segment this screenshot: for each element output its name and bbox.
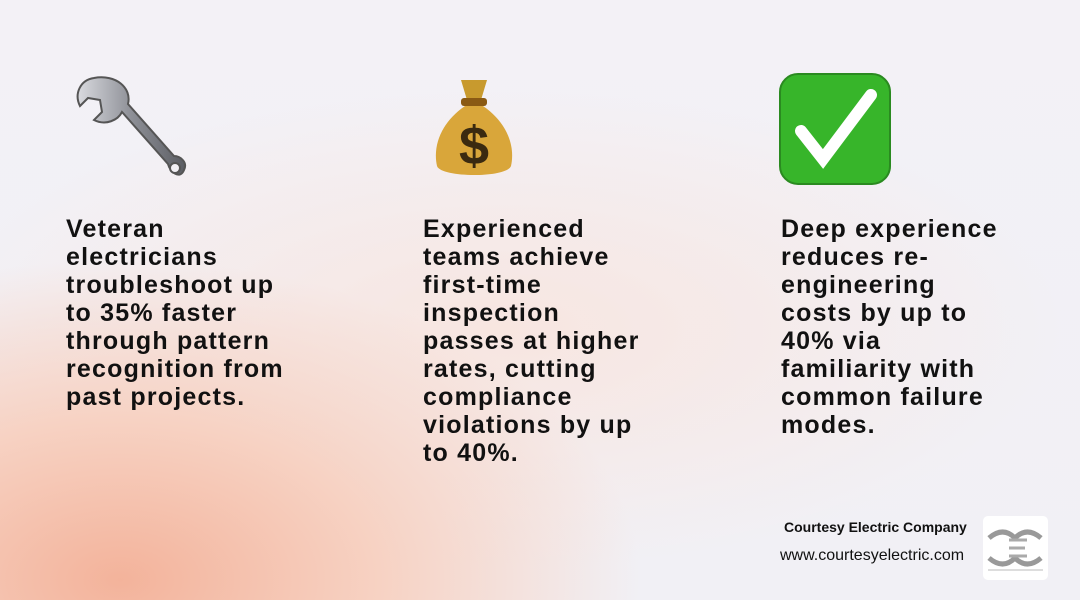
icon: wrench	[76, 76, 186, 176]
icon: money bag: $	[459, 116, 489, 176]
text: column 2: Experienced teams achieve first-time inspection passes at higher rates, cutting compliance violations by up to 40%.	[423, 215, 640, 467]
footer: company credit	[780, 519, 967, 564]
icon: money bag	[436, 80, 512, 176]
icon: check mark	[779, 73, 891, 185]
text: column 1: Veteran electricians troubleshoot up to 35% faster through pattern recognition from past projects.	[66, 215, 284, 411]
text: column 3: Deep experience reduces re-engineering costs by up to 40% via familiarity with common failure modes.	[781, 215, 998, 439]
footer: company credit: www.courtesyelectric.com	[780, 547, 964, 564]
logo	[983, 516, 1048, 580]
footer: company credit: Courtesy Electric Company	[784, 519, 967, 535]
